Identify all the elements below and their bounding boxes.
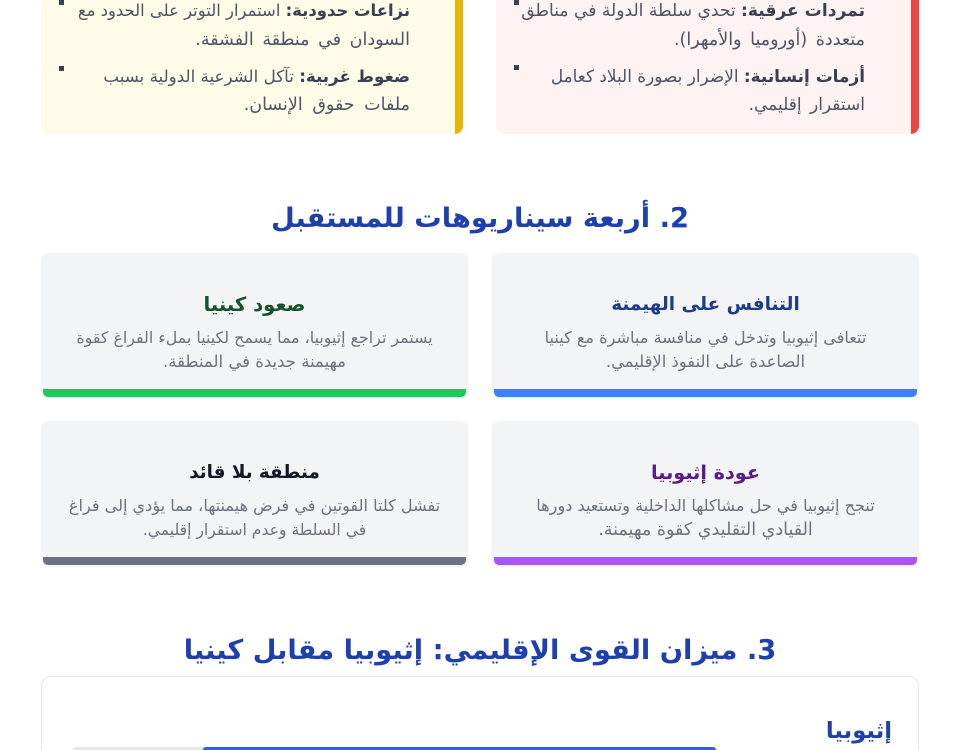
card text line 1: تفشل كلتا القوتين في فرض هيمنتها، مما يؤدي إلى فراغ — [69, 496, 440, 515]
card text line 2: في السلطة وعدم استقرار إقليمي. — [143, 521, 366, 539]
panel: balance of power chart — [41, 676, 919, 750]
card: competition for hegemony — [492, 253, 919, 398]
card title: صعود كينيا — [204, 293, 305, 316]
bar: Ethiopia value — [203, 747, 716, 750]
text: humanitarian crises: أزمات إنسانية: الإضرار بصورة البلاد كعامل — [551, 66, 865, 86]
card title: عودة إثيوبيا — [651, 461, 760, 484]
card text line 2: القيادي التقليدي كقوة مهيمنة. — [598, 520, 813, 540]
label: Ethiopia: إثيوبيا — [826, 718, 892, 744]
heading: regional balance of power: 3. ميزان القوى الإقليمي: إثيوبيا مقابل كينيا — [184, 635, 776, 666]
bullet: border conflicts — [59, 0, 64, 5]
bullet: ethnic rebellions — [514, 0, 519, 5]
bullet: humanitarian crises — [514, 65, 519, 70]
panel: ethnic rebellions (red) — [496, 0, 919, 134]
card text line 1: تتعافى إثيوبيا وتدخل في منافسة مباشرة مع كينيا — [545, 328, 866, 347]
card text line 2: مهيمنة جديدة في المنطقة. — [163, 352, 346, 371]
text: ethnic rebellions continued: متعددة (أوروميا والأمهرا). — [674, 30, 865, 50]
bar: Ethiopia track — [73, 747, 223, 750]
accent bar: blue — [494, 389, 917, 397]
text: border conflicts continued: السودان في منطقة الفشقة. — [195, 30, 410, 50]
card title: التنافس على الهيمنة — [611, 294, 800, 315]
panel: border conflicts (yellow) — [41, 0, 463, 134]
card text line 1: تنجح إثيوبيا في حل مشاكلها الداخلية وتستعيد دورها — [536, 496, 875, 515]
card text line 1: يستمر تراجع إثيوبيا، مما يسمح لكينيا بملء الفراغ كقوة — [76, 328, 433, 347]
heading: four scenarios: 2. أربعة سيناريوهات للمستقبل — [271, 203, 689, 234]
bullet: western pressure — [59, 66, 64, 71]
text: western pressure: ضغوط غربية: تآكل الشرعية الدولية بسبب — [103, 66, 410, 86]
accent bar: purple — [494, 557, 917, 565]
card: rise of Kenya — [41, 253, 468, 398]
card text line 2: الصاعدة على النفوذ الإقليمي. — [606, 352, 805, 371]
text: western pressure continued: ملفات حقوق الإنسان. — [244, 95, 410, 115]
card: region without a leader — [41, 421, 468, 566]
text: humanitarian crises continued: استقرار إقليمي. — [749, 95, 865, 115]
accent bar: green — [43, 389, 466, 397]
text: border conflicts: نزاعات حدودية: استمرار التوتر على الحدود مع — [78, 1, 410, 20]
card title: منطقة بلا قائد — [189, 462, 320, 483]
card: return of Ethiopia — [492, 421, 919, 566]
accent bar: gray — [43, 557, 466, 565]
text: ethnic rebellions: تمردات عرقية: تحدي سلطة الدولة في مناطق — [521, 1, 865, 21]
